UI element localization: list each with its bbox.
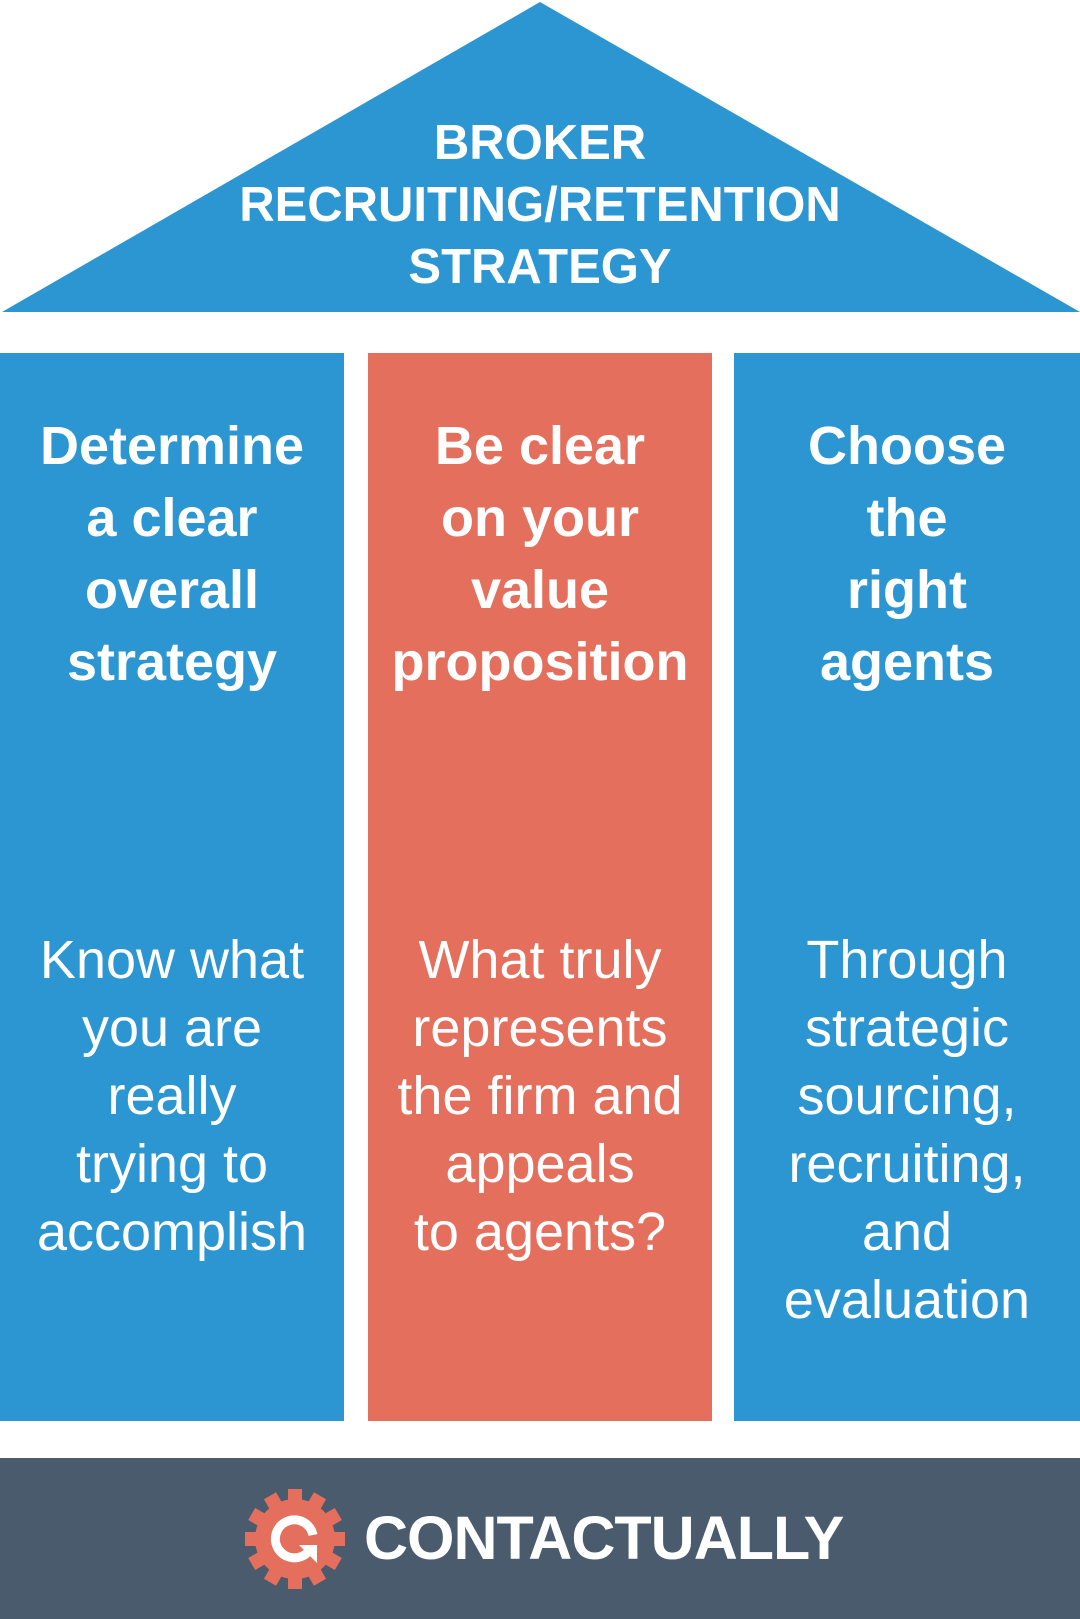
heading: agents: right xyxy=(847,560,967,620)
icon: gear logo xyxy=(245,1489,345,1589)
text: value proposition: to agents? xyxy=(414,1202,666,1262)
text: agents xyxy=(784,930,1030,1330)
heading: value proposition: proposition xyxy=(392,632,688,692)
heading: value proposition xyxy=(392,416,688,692)
text: agents: and xyxy=(862,1202,952,1262)
title xyxy=(239,116,841,294)
heading: strategy: overall xyxy=(85,560,259,620)
text: agents: evaluation xyxy=(784,1270,1030,1330)
heading: value proposition: on your xyxy=(441,488,639,548)
heading: strategy xyxy=(40,416,304,692)
text: agents: sourcing, xyxy=(797,1066,1017,1126)
title: STRATEGY xyxy=(408,240,672,294)
text: strategy: trying to xyxy=(76,1134,268,1194)
heading: strategy: strategy xyxy=(67,632,277,692)
heading: strategy: Determine xyxy=(40,416,304,476)
text: strategy: accomplish xyxy=(37,1202,307,1262)
title: RECRUITING/RETENTION xyxy=(239,178,841,232)
footer xyxy=(0,1458,1080,1619)
panel: agents xyxy=(734,353,1080,1421)
logo text: CONTACTUALLY xyxy=(364,1504,843,1572)
title: BROKER xyxy=(434,116,646,170)
text: strategy: really xyxy=(107,1066,237,1126)
text: value proposition: What truly xyxy=(418,930,662,990)
heading: agents: Choose xyxy=(808,416,1006,476)
text: strategy: you are xyxy=(82,998,262,1058)
heading: agents: agents xyxy=(820,632,994,692)
heading: agents xyxy=(808,416,1006,692)
panel: value proposition xyxy=(368,353,712,1421)
text: agents: recruiting, xyxy=(788,1134,1026,1194)
heading: value proposition: value xyxy=(471,560,609,620)
heading: agents: the xyxy=(866,488,948,548)
text: value proposition: appeals xyxy=(445,1134,635,1194)
text: agents: Through xyxy=(806,930,1008,990)
text: strategy: Know what xyxy=(40,930,304,990)
heading: strategy: a clear xyxy=(86,488,258,548)
text: value proposition: the firm and xyxy=(397,1066,683,1126)
text: value proposition xyxy=(397,930,683,1262)
text: strategy xyxy=(37,930,307,1262)
text: value proposition: represents xyxy=(412,998,668,1058)
heading: value proposition: Be clear xyxy=(435,416,645,476)
roof xyxy=(2,2,1080,312)
text: agents: strategic xyxy=(805,998,1009,1058)
panel: strategy xyxy=(0,353,344,1421)
